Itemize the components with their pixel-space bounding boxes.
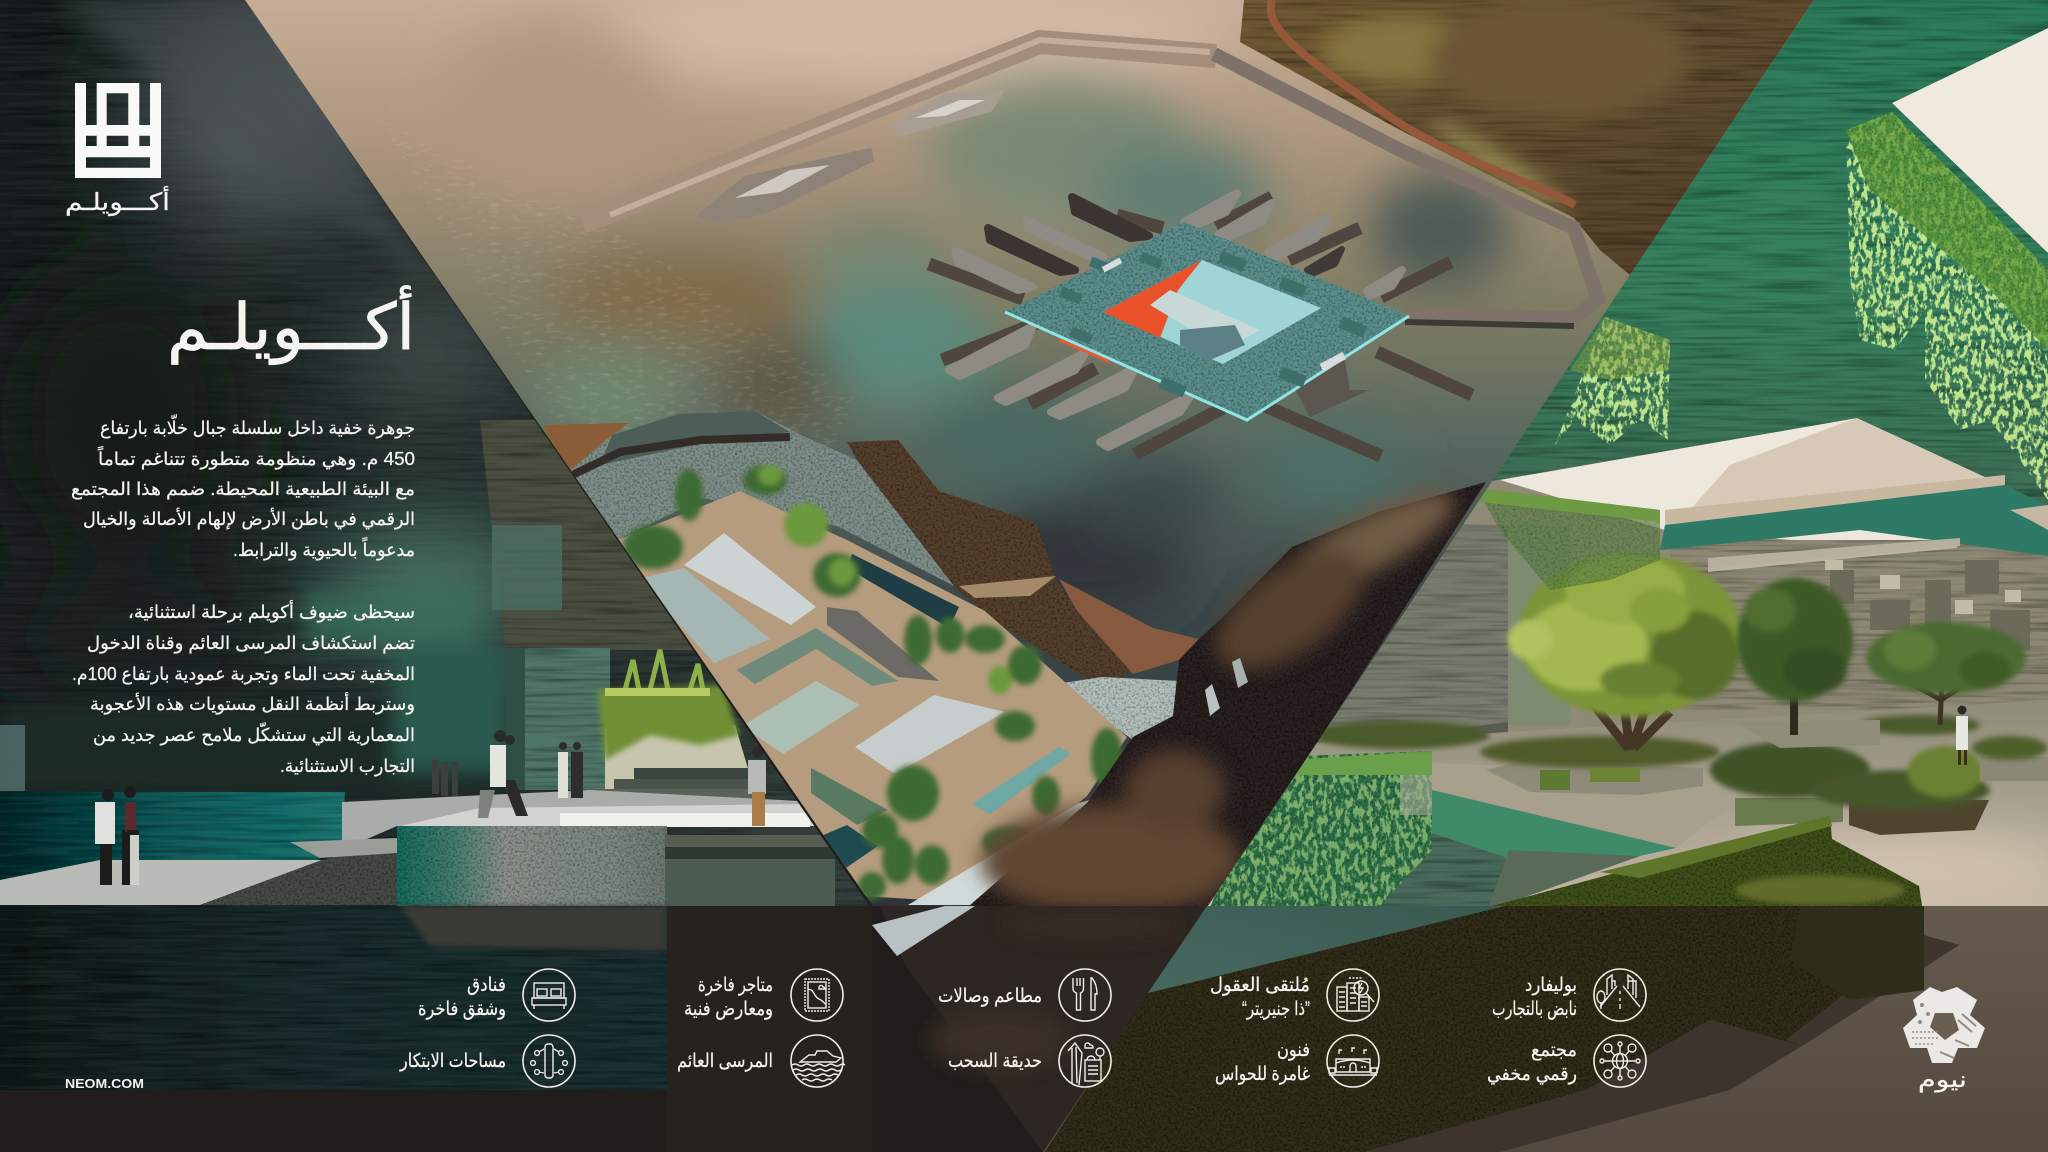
lower green glass slab <box>1211 763 1693 906</box>
panel: central marina aerial <box>245 0 1815 915</box>
feature: hotels: وشقق فاخرة <box>418 999 506 1020</box>
text block: second paragraph: سيحظى ضيوف أكويلم برحلة استثنائية، <box>128 600 415 623</box>
feature: immersive arts <box>1215 1035 1379 1087</box>
icon: towers and garden <box>1059 1035 1111 1087</box>
panel: left underground city scene <box>0 0 870 906</box>
text block: intro paragraph: مدعوماً بالحيوية والترابط. <box>233 537 415 561</box>
bottom dark band <box>0 906 2048 1152</box>
feature: boulevard pulsing with experiences <box>1492 969 1646 1021</box>
feature: restaurants and lounges <box>938 969 1111 1021</box>
feature: hotels <box>418 969 575 1021</box>
text block: second paragraph <box>72 600 415 776</box>
collage: rock and sunken garden <box>543 411 1199 905</box>
text block: intro paragraph <box>71 414 415 561</box>
feature: luxury shops and galleries: متاجر فاخرة <box>698 975 773 996</box>
icon: yacht on waves <box>791 1035 845 1087</box>
icon: building with magnifier <box>1327 969 1379 1021</box>
feature: innovation spaces: مساحات الابتكار <box>399 1051 506 1072</box>
icon: meeting table <box>523 1035 575 1087</box>
icon: framed painting <box>791 969 843 1021</box>
hanging vines lower left <box>1211 751 1432 906</box>
icon: theatre stage <box>1327 1035 1379 1087</box>
feature: boulevard pulsing with experiences: بوليفارد <box>1525 975 1577 996</box>
collage: foreground rocks <box>969 473 1486 915</box>
feature: floating marina: المرسى العائم <box>677 1051 773 1072</box>
stepped building <box>1300 522 1508 745</box>
water pool <box>0 792 345 880</box>
text block: intro paragraph: مع البيئة الطبيعية المحيطة. ضمم هذا المجتمع <box>71 479 415 500</box>
text block: second paragraph: وستربط أنظمة النقل مستويات هذه الأعجوبة <box>90 692 415 715</box>
logo: NEOM star <box>1903 987 1985 1092</box>
hedge foreground <box>1492 816 1922 906</box>
text block: intro paragraph: 450 م. وهي منظومة متطورة تتناغم تماماً <box>97 446 415 470</box>
feature: hidden digital community: مجتمع <box>1531 1040 1577 1061</box>
feature: floating marina <box>677 1035 845 1087</box>
background building <box>1670 540 2048 710</box>
logo wordmark: أكـــويلـم <box>65 186 170 216</box>
second tree <box>1737 578 1853 735</box>
concrete beam <box>1660 475 2048 558</box>
vines under beam <box>1476 488 1660 590</box>
third tree <box>1866 622 2026 725</box>
sky <box>1892 28 2048 253</box>
feature: luxury shops and galleries <box>684 969 843 1021</box>
feature: minds gathering, The Generator <box>1210 969 1379 1021</box>
feature: hidden digital community <box>1487 1035 1646 1087</box>
text block: second paragraph: تضم استكشاف المرسى العائم وقناة الدخول <box>87 633 415 654</box>
icon: fork and knife <box>1059 969 1111 1021</box>
glowing inner courtyard <box>1103 260 1321 364</box>
feature: hidden digital community: رقمي مخفي <box>1487 1064 1577 1085</box>
person in white <box>1956 706 1968 765</box>
ground terrace <box>1200 700 2048 906</box>
docks around the floating island <box>929 197 1472 456</box>
feature: luxury shops and galleries: ومعارض فنية <box>684 999 773 1020</box>
feature: restaurants and lounges: مطاعم وصالات <box>938 986 1042 1007</box>
feature: innovation spaces <box>399 1035 575 1087</box>
logo: Aquellum mark <box>65 83 170 216</box>
steps and platforms <box>0 768 835 906</box>
text block: second paragraph: التجارب الاستثنائية. <box>280 756 415 776</box>
text block: intro paragraph: الرقمي في باطن الأرض لإلهام الأصالة والخيال <box>83 508 415 530</box>
icon: bed <box>523 969 575 1021</box>
green concrete ceiling slab <box>1486 0 2048 506</box>
feature: minds gathering, The Generator: مُلتقى العقول <box>1210 975 1310 996</box>
feature: cloud garden: حديقة السحب <box>948 1051 1042 1072</box>
text block: intro paragraph: جوهرة خفية داخل سلسلة جبال خلّابة بارتفاع <box>100 414 415 439</box>
feature: immersive arts: فنون <box>1277 1040 1310 1061</box>
text block: second paragraph: المعمارية التي ستشكّل ملامح عصر جديد من <box>93 722 415 746</box>
NEOM wordmark: نيوم <box>1918 1067 1967 1092</box>
big tree <box>1508 553 1742 750</box>
right image continuation <box>1043 906 2048 1152</box>
feature: minds gathering, The Generator: ”ذا جنيريتر“ <box>1242 999 1310 1020</box>
hanging vines upper slab <box>1555 112 2048 500</box>
panel: right green atrium scene <box>1208 0 2048 906</box>
title: أكـــويلـم <box>167 285 415 365</box>
icon: boulevard road and towers <box>1594 969 1646 1021</box>
sunlit ripples on water <box>380 120 860 520</box>
planters and shrubs <box>1310 715 2048 835</box>
water tone left <box>0 906 667 1090</box>
mountain <box>1240 0 1814 275</box>
icon: network globe <box>1594 1035 1646 1087</box>
text block: second paragraph: المخفية تحت الماء وتجربة عمودية بارتفاع 100م. <box>72 664 415 685</box>
website label: NEOM.COM <box>65 1076 144 1091</box>
feature: boulevard pulsing with experiences: نابض بالتجارب <box>1492 999 1577 1020</box>
wall with hanging plants <box>597 650 750 792</box>
seawall <box>582 40 1598 326</box>
feature: immersive arts: غامرة للحواس <box>1215 1064 1310 1085</box>
yachts <box>700 92 1402 447</box>
floating island <box>1005 222 1409 420</box>
feature: hotels: فنادق <box>467 975 506 996</box>
people on the plaza <box>95 730 766 885</box>
feature: cloud garden <box>948 1035 1111 1087</box>
